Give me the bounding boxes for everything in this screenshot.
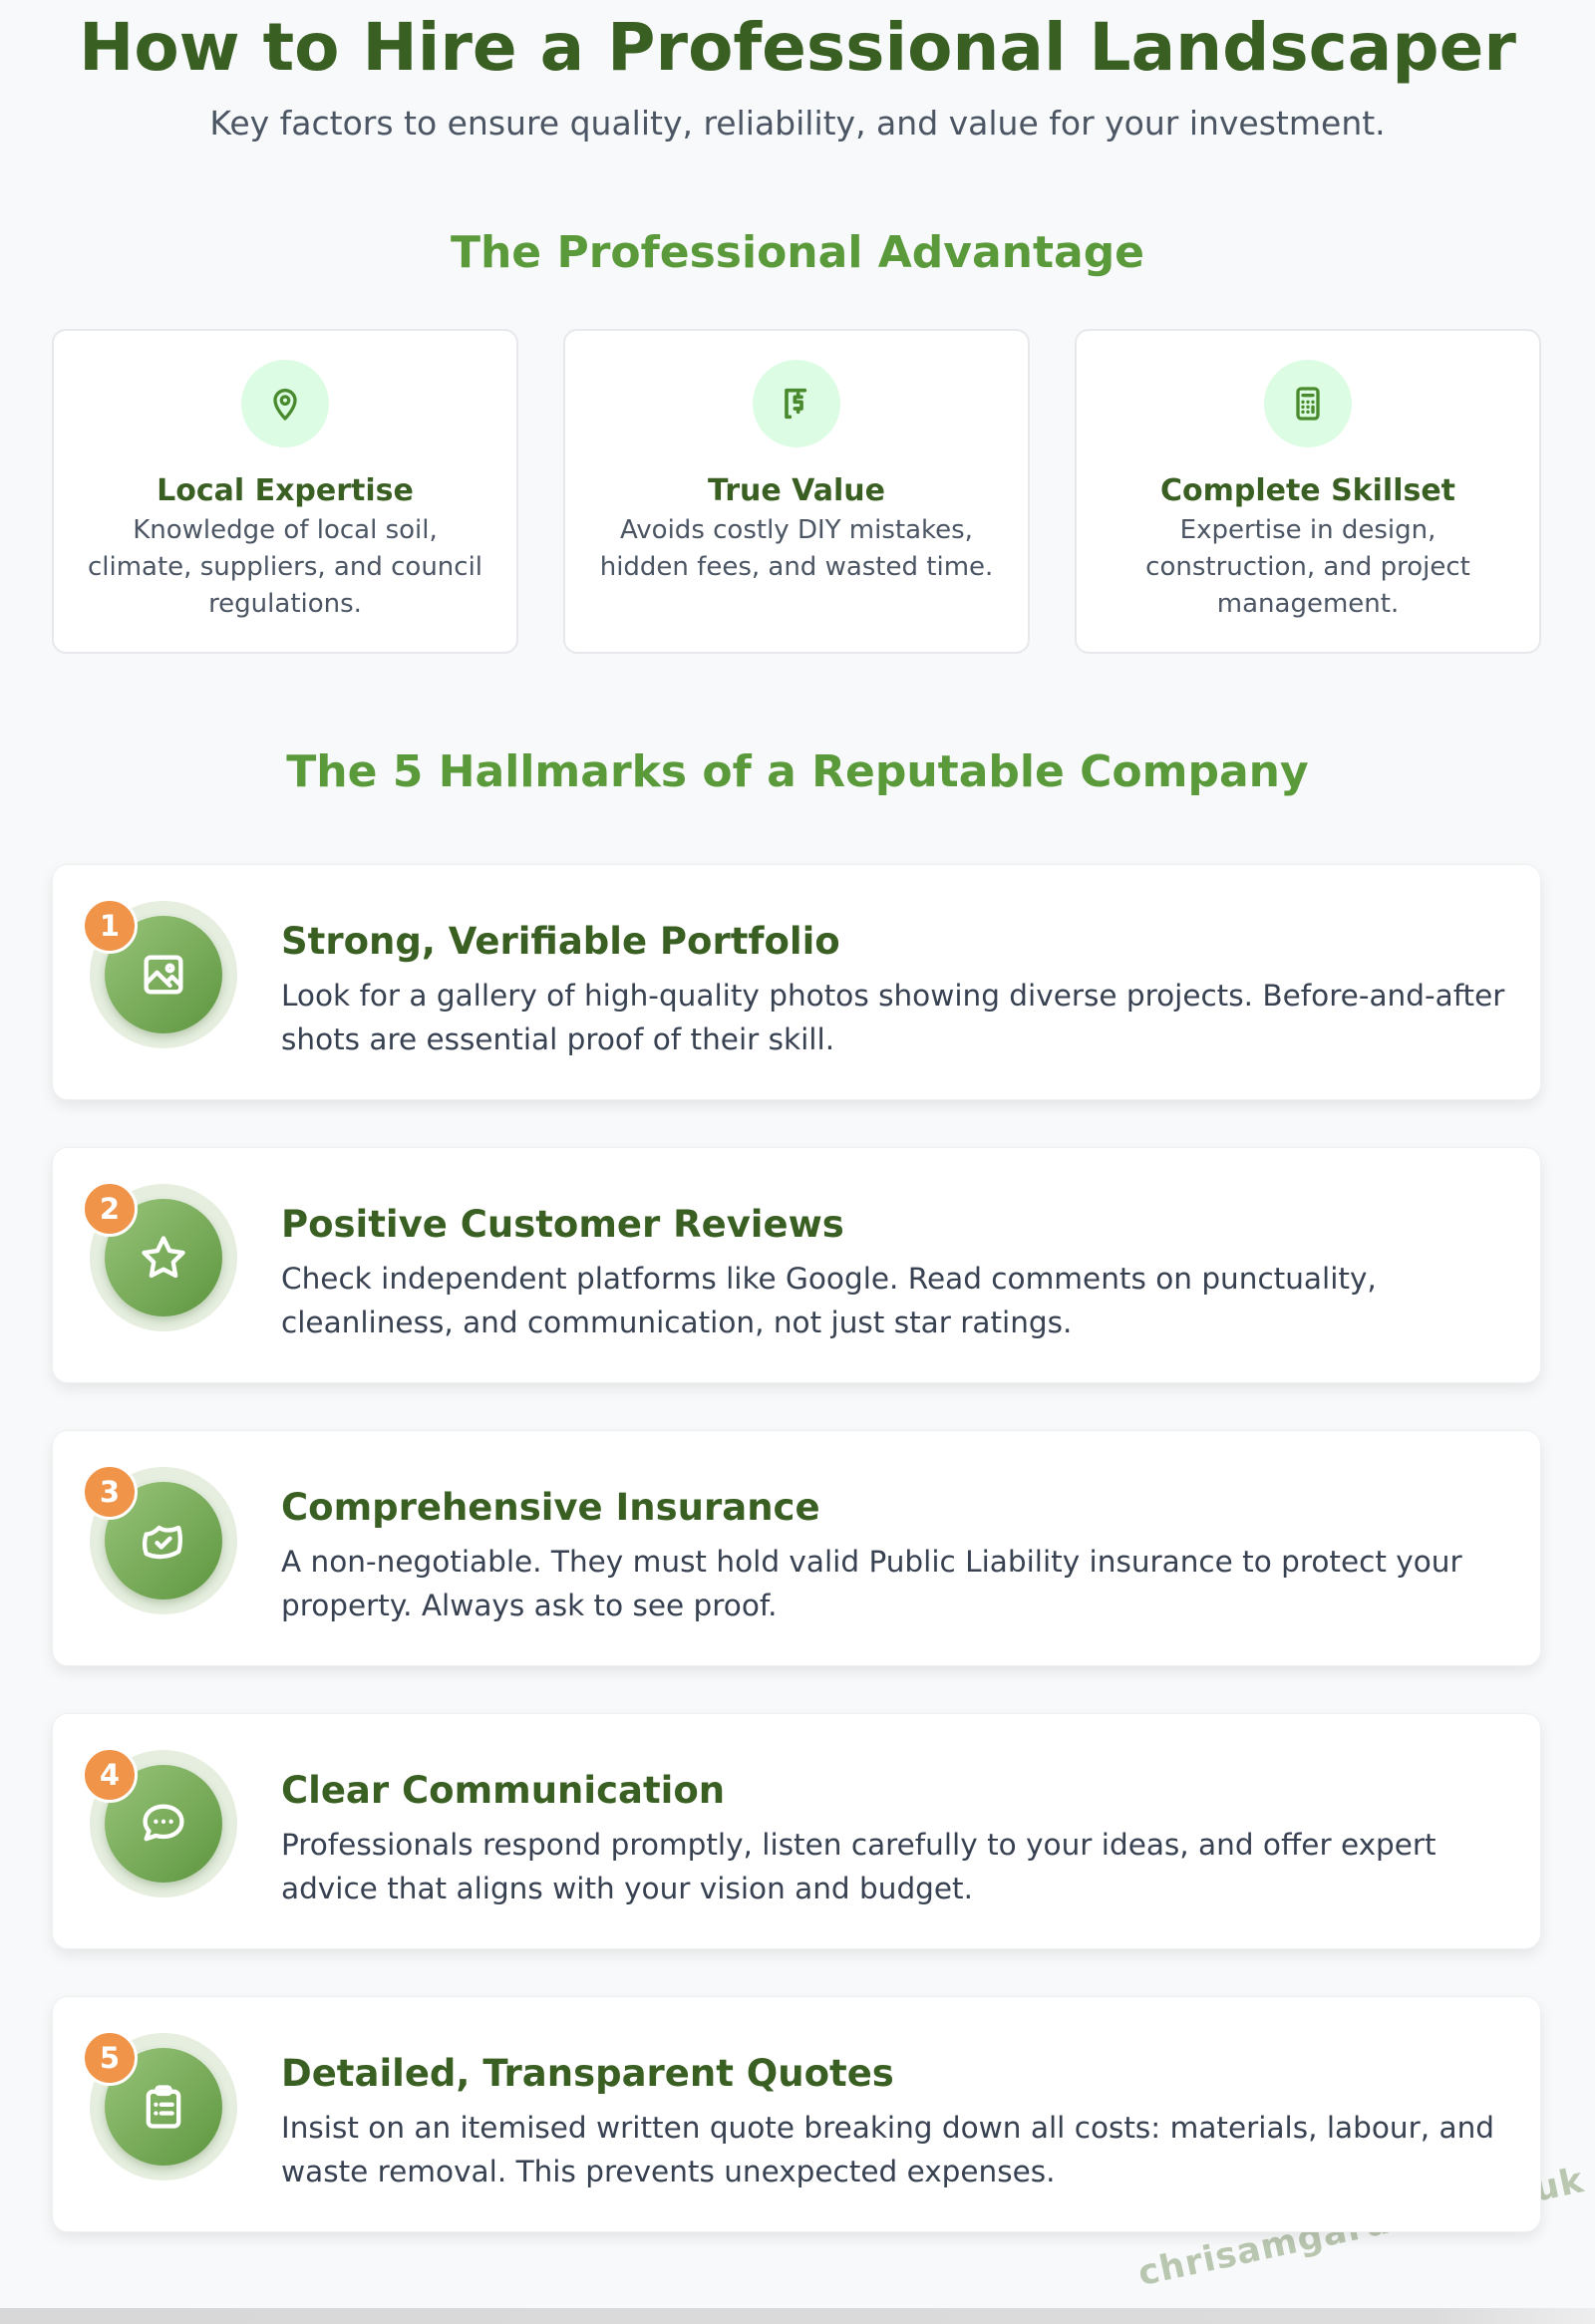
card text: Expertise in design, <box>1180 515 1436 545</box>
subtitle: Key factors to ensure quality, reliability, and value for your investment. <box>209 104 1386 143</box>
hallmark title: Positive Customer Reviews <box>281 1203 844 1246</box>
hallmark text: Look for a gallery of high-quality photos showing diverse projects. Before-and-after shots are essential proof of their skill. <box>281 979 1504 1056</box>
icon: receipt <box>753 360 840 447</box>
panel: complete skillset <box>1075 329 1541 654</box>
card text <box>88 515 482 619</box>
card title: Complete Skillset <box>1160 473 1455 508</box>
icon: chat bubble <box>90 1750 237 1897</box>
badge 1 <box>82 898 138 954</box>
hallmark 3 <box>52 1430 1541 1666</box>
card text: climate, suppliers, and council <box>88 552 482 582</box>
badge 5 <box>82 2030 138 2086</box>
card text: management. <box>1217 589 1399 619</box>
panel: local expertise <box>52 329 518 654</box>
hallmark 4 <box>52 1713 1541 1949</box>
card text <box>1145 515 1470 619</box>
heading: professional advantage: The Professional Advantage <box>451 227 1144 278</box>
icon: calculator <box>1264 360 1352 447</box>
icon: star <box>90 1184 237 1331</box>
badge 3: 3 <box>100 1475 120 1509</box>
badge 5: 5 <box>100 2041 120 2075</box>
hallmark text: Check independent platforms like Google. Read comments on punctuality, cleanliness, and communication, not just star ratings. <box>281 1262 1377 1339</box>
heading: hallmarks: The 5 Hallmarks of a Reputable Company <box>286 746 1309 797</box>
card text <box>600 515 993 582</box>
hallmark title: Clear Communication <box>281 1769 725 1812</box>
card text: hidden fees, and wasted time. <box>600 552 993 582</box>
card text: construction, and project <box>1145 552 1470 582</box>
card text: regulations. <box>208 589 362 619</box>
hallmark 2 <box>52 1147 1541 1383</box>
badge 1: 1 <box>100 909 120 943</box>
card title: Local Expertise <box>157 473 414 508</box>
watermark: chrisamgardens.co.uk <box>1134 2161 1588 2294</box>
icon: clipboard <box>90 2033 237 2180</box>
card text: Knowledge of local soil, <box>133 515 438 545</box>
icon: image <box>90 901 237 1048</box>
hallmark title: Strong, Verifiable Portfolio <box>281 920 840 963</box>
hallmark title: Comprehensive Insurance <box>281 1486 820 1529</box>
title: How to Hire a Professional Landscaper <box>79 9 1516 86</box>
hallmark text: A non-negotiable. They must hold valid Public Liability insurance to protect your property. Always ask to see proof. <box>281 1545 1462 1622</box>
badge 3 <box>82 1464 138 1520</box>
icon: map pin <box>241 360 329 447</box>
card title: True Value <box>708 473 885 508</box>
hallmark 1 <box>52 864 1541 1100</box>
hallmark 5 <box>52 1996 1541 2232</box>
icon: shield check <box>90 1467 237 1614</box>
hallmark text: Insist on an itemised written quote breaking down all costs: materials, labour, and waste removal. This prevents unexpected expenses. <box>281 2111 1494 2188</box>
hallmark title: Detailed, Transparent Quotes <box>281 2052 894 2095</box>
hallmark text: Professionals respond promptly, listen carefully to your ideas, and offer expert advice that aligns with your vision and budget. <box>281 1828 1436 1905</box>
badge 2 <box>82 1181 138 1237</box>
panel: true value <box>563 329 1030 654</box>
card text: Avoids costly DIY mistakes, <box>620 515 973 545</box>
badge 4: 4 <box>100 1758 120 1792</box>
badge 4 <box>82 1747 138 1803</box>
badge 2: 2 <box>100 1192 120 1226</box>
